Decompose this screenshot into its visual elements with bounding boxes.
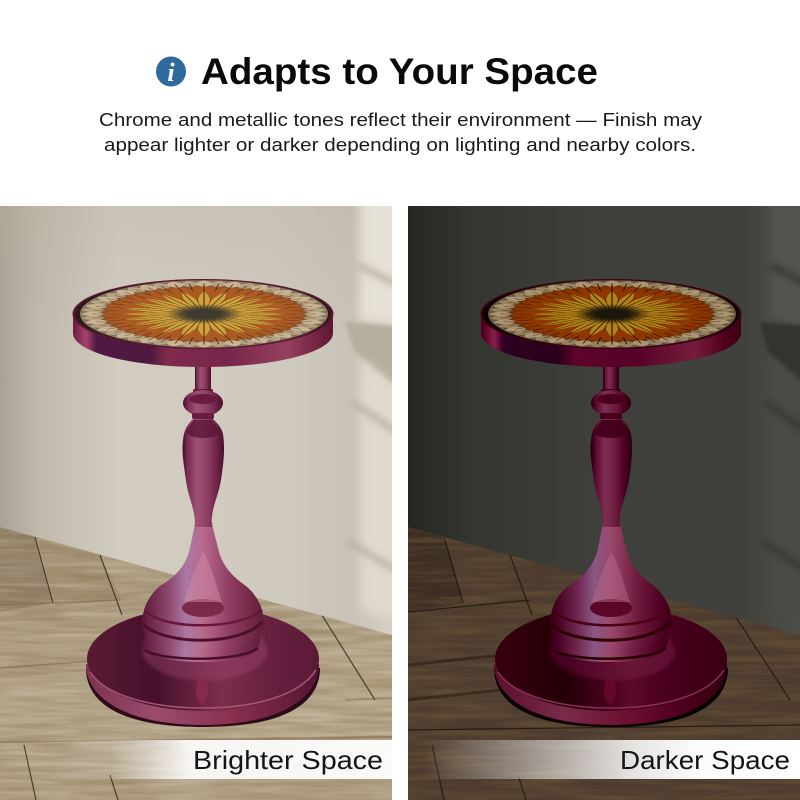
text block: description bbox=[99, 110, 702, 155]
title: Adapts to Your Space bbox=[201, 51, 598, 92]
caption band: darker space bbox=[424, 740, 800, 779]
caption band: brighter space: Brighter Space bbox=[193, 745, 383, 775]
wall bbox=[0, 206, 392, 635]
wood floor bbox=[0, 520, 392, 800]
wall bbox=[408, 190, 800, 646]
icon: info circle bbox=[156, 56, 186, 87]
panel: brighter space bbox=[0, 190, 410, 800]
text block: description: appear lighter or darker depending on lighting and nearby colors. bbox=[104, 135, 696, 155]
table bbox=[474, 276, 750, 727]
text block: description: Chrome and metallic tones reflect their environment — Finish may bbox=[99, 110, 702, 130]
caption band: brighter space bbox=[52, 740, 392, 779]
caption band: darker space: Darker Space bbox=[620, 745, 790, 775]
table bbox=[66, 276, 342, 727]
wood floor bbox=[408, 520, 800, 800]
panel: darker space bbox=[408, 190, 800, 800]
icon: info circle: i bbox=[167, 58, 175, 87]
